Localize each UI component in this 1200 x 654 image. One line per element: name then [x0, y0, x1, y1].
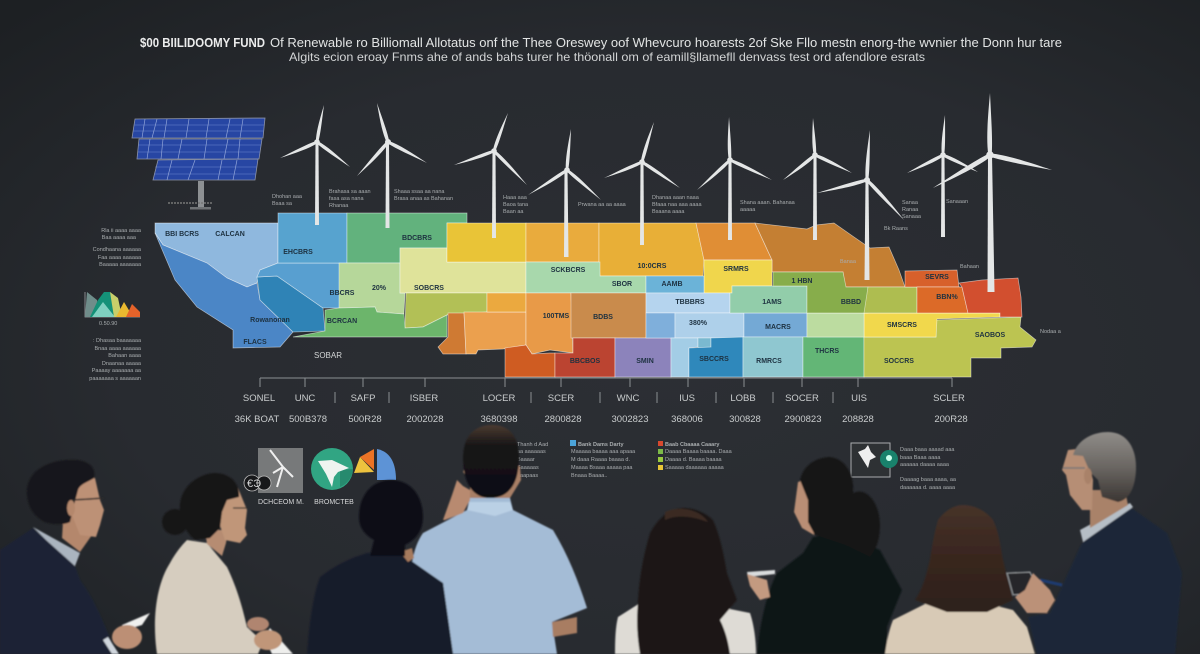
timeline axis — [235, 378, 968, 425]
region: pale green centre — [526, 262, 646, 293]
left note 1: Baaaaa aaaaaaa — [99, 262, 142, 268]
person 2 — [155, 473, 293, 654]
left note 2: : Dhasaa baaaaaaa — [93, 338, 142, 344]
turbine 10 — [932, 93, 1053, 292]
title — [140, 36, 1062, 64]
text block: Saaaaas — [517, 465, 539, 471]
region labels: 20% — [372, 285, 387, 292]
region labels: 380% — [689, 320, 708, 327]
turbine annotations: Prwana aa aa aaaa — [578, 202, 627, 208]
text block: Thanh d Aad — [517, 442, 548, 448]
region labels: EHCBRS — [283, 249, 313, 256]
area chart — [85, 292, 140, 327]
left note 2: Bahaan aaaa — [108, 353, 142, 359]
left note 2: paaaaaaa s aaaaaan — [89, 376, 141, 382]
region labels: SMSCRS — [887, 322, 917, 329]
region: central valley — [257, 276, 325, 332]
legend blue: M daaa Raaaa baaaa d. — [571, 457, 630, 463]
region: orange north — [526, 223, 599, 262]
title: Of Renewable ro Billiomall Allotatus onf the Thee Oreswey oof Whevcuro hoarests 2of Ske Fllo mestn enorg-the wvnier the Donn hur tare — [270, 36, 1062, 50]
region labels: SAOBOS — [975, 332, 1005, 339]
left note 1: Baa aaaa aaa — [102, 235, 137, 241]
region labels: SOCCRS — [884, 358, 914, 365]
region: yellow green — [864, 287, 917, 313]
region: yellow — [447, 223, 526, 262]
text block right — [900, 447, 957, 491]
region labels: SCKBCRS — [551, 267, 586, 274]
label: solar: SOBAR — [314, 351, 342, 360]
timeline axis: SONEL — [243, 393, 275, 404]
region labels: 1AMS — [762, 299, 782, 306]
timeline axis: 200R28 — [934, 414, 968, 425]
left note 1 — [93, 228, 142, 268]
turbine 1 — [279, 105, 351, 225]
left note 1: Faa aaaa aaaaaa — [98, 255, 142, 261]
turbine annotations: Rhanaa — [329, 203, 349, 209]
timeline axis: 208828 — [842, 414, 874, 425]
text block right: daaaaaa d. aaaa aaaa — [900, 485, 956, 491]
region: yellow centre — [704, 260, 772, 293]
legend blue: Bnaaa Baaaa.. — [571, 473, 608, 479]
region labels: BBN% — [936, 294, 958, 301]
timeline axis: LOBB — [730, 393, 756, 404]
region labels: RMRCS — [756, 358, 782, 365]
timeline axis: WNC — [617, 393, 639, 404]
region: green south — [803, 337, 864, 377]
timeline axis: UIS — [851, 393, 867, 404]
region: red east — [959, 278, 1022, 317]
region labels: BDCBRS — [402, 235, 432, 242]
turbine annotations: Nodaa a — [1040, 329, 1062, 335]
legend blue: Bank Dams Darty — [578, 442, 624, 448]
region: blue small — [646, 276, 704, 293]
region labels: SRMRS — [723, 266, 749, 273]
turbine annotations: aaaaa — [740, 207, 756, 213]
timeline axis: SCLER — [933, 393, 965, 404]
timeline axis: UNC — [295, 393, 315, 404]
region: pale blue — [646, 293, 730, 313]
region: olive east — [864, 317, 1036, 377]
region: pale blue south — [675, 313, 744, 338]
turbine annotations: Ranaa — [902, 207, 919, 213]
legend blue: Maaaa Bsaaa aaaaa paa — [571, 465, 633, 471]
region labels: MACRS — [765, 324, 791, 331]
text block right: aaaaaa daaaa aaaa — [900, 462, 950, 468]
left note 2: Paaaay aaaaaaa aa — [92, 368, 142, 374]
legend red: Saaaaa daaaaaa aaaaa — [665, 465, 725, 471]
region: pale yellow strip — [400, 248, 526, 293]
region: north green — [347, 213, 467, 263]
region: purple — [615, 338, 671, 377]
map of regions — [155, 213, 1036, 377]
region: mid blue — [257, 263, 340, 308]
person 7 — [885, 505, 1035, 654]
region labels: 10:0CRS — [638, 263, 667, 270]
region labels — [165, 231, 1005, 365]
left note 2: Bnaa aaaa aaaaaa — [94, 346, 142, 352]
turbine annotations: Bk Raans — [884, 226, 908, 232]
region labels: SMIN — [636, 358, 654, 365]
region: mid blue east — [744, 313, 807, 337]
region labels: SEVRS — [925, 274, 949, 281]
text block: aaapaas — [517, 473, 538, 479]
turbine 5 — [603, 121, 681, 245]
region labels: BBBD — [841, 299, 861, 306]
area chart: 0.50.90 — [99, 321, 117, 327]
region: north blue — [278, 213, 347, 263]
timeline axis: 500R28 — [348, 414, 382, 425]
turbine annotations: Brahasa sa aaan — [329, 189, 371, 195]
region: dark orange — [438, 313, 466, 354]
turbine annotations: Dhanaa aaan naaa — [652, 195, 700, 201]
region labels: BBCRS — [330, 290, 355, 297]
turbine annotations: Banaa — [840, 259, 857, 265]
pie chart — [354, 449, 396, 480]
region labels: SOBCRS — [414, 285, 444, 292]
region: brown — [755, 223, 905, 287]
legend red: Daaaa Baaaa baaaa. Daaa — [665, 449, 733, 455]
region labels: BDBS — [593, 314, 613, 321]
region: orange strip — [487, 293, 526, 312]
person 1 — [0, 460, 150, 654]
timeline axis: 2900823 — [785, 414, 821, 425]
region: gold — [599, 223, 704, 276]
turbine 6 — [696, 117, 773, 240]
region labels: FLACS — [243, 339, 267, 346]
timeline axis: ISBER — [410, 393, 438, 404]
region: deep blue — [689, 337, 743, 377]
turbine annotations: Brasa anaa as Bahanan — [394, 196, 453, 202]
turbine annotations: Dhohan aaa — [272, 194, 303, 200]
people — [0, 425, 1182, 654]
region labels: Rowanonan — [250, 317, 290, 324]
icon: turbine card — [244, 448, 304, 506]
turbine annotations: Shaaa ssaa aa nana — [394, 189, 445, 195]
turbine annotations: Sanaa — [902, 200, 919, 206]
region labels: BBI BCRS — [165, 231, 199, 238]
region labels: AAMB — [662, 281, 682, 288]
region: pale blue low — [671, 338, 698, 377]
turbine 3 — [453, 112, 528, 238]
icon: globe: BROMCTEB — [314, 499, 354, 506]
region: light orange — [464, 312, 526, 354]
region: bright yellow — [864, 313, 1000, 337]
icon: map card — [851, 443, 898, 477]
turbine annotations: Bsaana aaaa — [652, 209, 685, 215]
turbine annotations: Baan aa — [503, 209, 524, 215]
region: olive — [405, 293, 487, 328]
legend red: Baab Cbaaaa Caaary — [665, 442, 720, 448]
region labels: BCRCAN — [327, 318, 357, 325]
person 8 — [1007, 432, 1182, 654]
turbine 2 — [356, 103, 428, 228]
icon: solar panel — [132, 118, 265, 210]
left note 1: Rla ii aaaa aaaa — [101, 228, 142, 234]
region: orange east — [917, 287, 968, 313]
timeline axis: 2002028 — [407, 414, 443, 425]
person 6 — [747, 457, 902, 654]
text block — [517, 442, 548, 479]
legend red: Daaaa d. Baaaa baaaa — [665, 457, 723, 463]
person 4 — [412, 425, 587, 654]
region: orange tall — [526, 293, 573, 354]
region: southwest coast — [155, 233, 293, 348]
region: orange — [696, 223, 772, 260]
turbine annotations — [272, 189, 1062, 335]
region labels: BBCBOS — [570, 358, 600, 365]
turbine annotations: Sanaaa — [902, 214, 922, 220]
turbine 4 — [527, 129, 602, 257]
title: Algits ecion eroay Fnms ahe of ands bahs turer he thöonall om of eamill§llamefll denvass test ord afendlore esrats — [289, 50, 925, 64]
region: pale green — [339, 263, 405, 314]
icon: turbine card: €Э — [247, 478, 261, 490]
turbine 9 — [906, 115, 979, 237]
timeline axis: 368006 — [671, 414, 703, 425]
region: tan — [571, 293, 646, 338]
turbine 8 — [817, 130, 906, 280]
timeline axis: IUS — [679, 393, 695, 404]
text block: Baaaar — [517, 457, 535, 463]
region: southern green — [293, 307, 447, 337]
timeline axis: 3680398 — [481, 414, 517, 425]
timeline axis: SCER — [548, 393, 574, 404]
turbine annotations: Baoa tana — [503, 202, 529, 208]
text block right: Daaaag baaa aaaa, aa — [900, 477, 957, 483]
region: northwest coast — [155, 223, 278, 287]
region: red — [555, 338, 615, 377]
timeline axis: 36K BOAT — [235, 414, 280, 425]
region: pale green east — [807, 313, 864, 337]
left note 2: Dnaanaa aaaaa — [102, 361, 142, 367]
timeline axis: 500B378 — [289, 414, 327, 425]
turbines — [279, 93, 1053, 292]
region labels: SBOR — [612, 281, 632, 288]
turbine annotations: Sanaaan — [946, 199, 968, 205]
region labels: 1 HBN — [791, 278, 813, 285]
person 5 — [615, 508, 756, 654]
turbine annotations: Shana aaan. Bahanaa — [740, 200, 796, 206]
timeline axis: LOCER — [483, 393, 516, 404]
region: orange-red — [905, 270, 959, 287]
turbine annotations: Haaa aaa — [503, 195, 528, 201]
legend red — [658, 441, 733, 471]
region labels: SBCCRS — [699, 356, 729, 363]
legend blue: Maaaaa baaaa aaa apaaa — [571, 449, 636, 455]
turbine 7 — [782, 118, 853, 240]
left note 2 — [89, 338, 142, 382]
region: teal small — [698, 338, 711, 348]
region: blue square — [646, 313, 675, 338]
timeline axis: SAFP — [351, 393, 375, 404]
timeline axis: 2800828 — [545, 414, 581, 425]
left note 1: Condhaana aaaaaa — [93, 247, 142, 253]
icon: globe — [311, 448, 354, 506]
text block: aa aaaaaas — [517, 449, 546, 455]
region: green mid — [773, 272, 868, 313]
turbine annotations: Bfaaa naa aaa aaaa — [652, 202, 702, 208]
icon: turbine card: DCHCEOM M. — [258, 499, 304, 506]
text block right: Daaa baaa aaaad aaa — [900, 447, 955, 453]
title: $00 BIILIDOOMY FUND — [140, 36, 265, 50]
text block right: baaa Baaa aaaa — [900, 455, 941, 461]
turbine annotations: Bsaa sa — [272, 201, 293, 207]
region: teal — [730, 286, 807, 313]
region: teal pale — [743, 337, 803, 377]
turbine annotations: fasa asa nana — [329, 196, 364, 202]
timeline axis: 300828 — [729, 414, 761, 425]
region labels: CALCAN — [215, 231, 245, 238]
region: burnt orange — [505, 345, 555, 377]
person 3 — [307, 480, 453, 654]
timeline axis: SOCER — [785, 393, 819, 404]
turbine annotations: Bahaan — [960, 264, 979, 270]
region labels: 100TMS — [543, 313, 570, 320]
legend blue — [570, 440, 636, 479]
region labels: TBBBRS — [675, 299, 705, 306]
timeline axis: 3002823 — [612, 414, 648, 425]
region labels: THCRS — [815, 348, 839, 355]
